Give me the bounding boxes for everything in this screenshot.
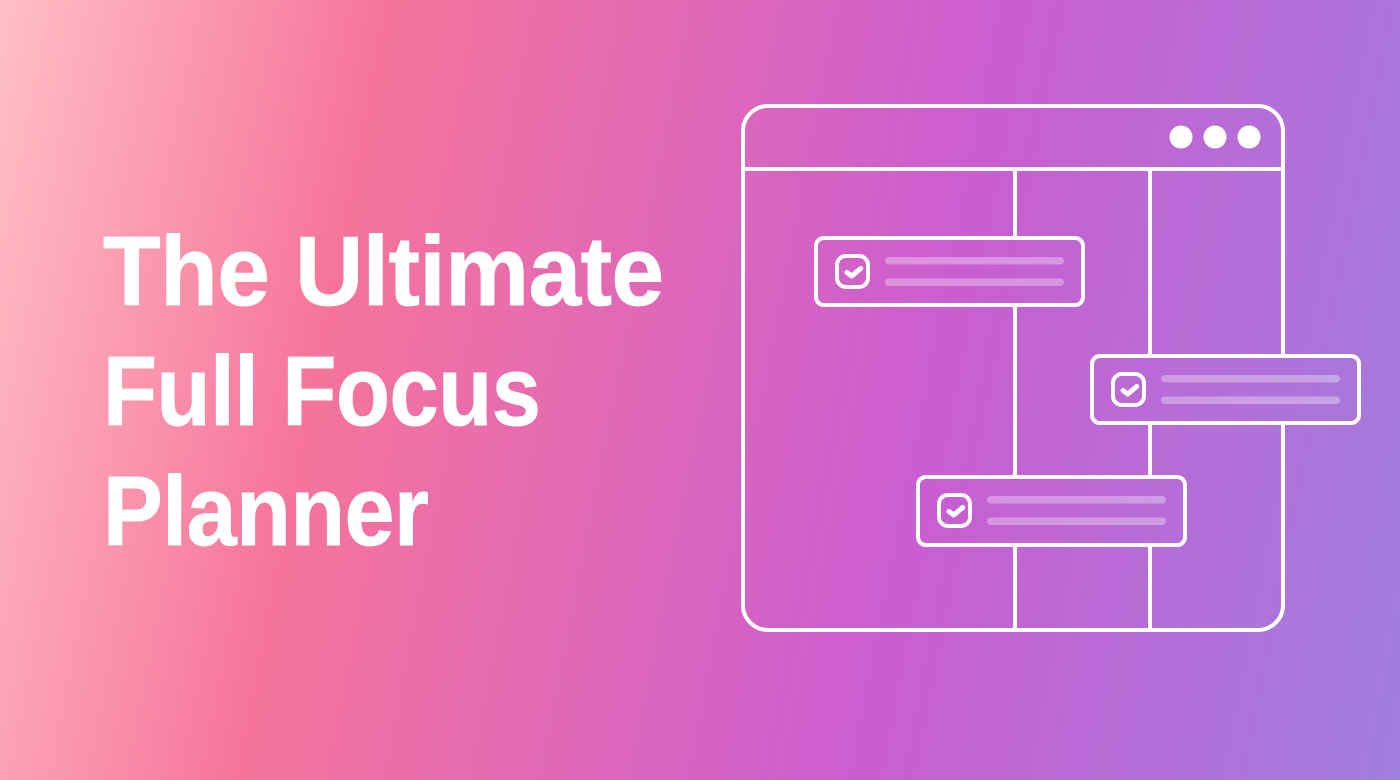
title: Full Focus [103, 336, 540, 446]
window frame [743, 106, 1283, 630]
calendar column lines [1015, 169, 1150, 630]
title: Planner [103, 456, 428, 566]
task card 3 [918, 477, 1185, 545]
task card 2 [1092, 356, 1359, 423]
task card 1 [816, 238, 1083, 305]
title [103, 216, 664, 566]
title: The Ultimate [103, 216, 664, 326]
window control dots [1170, 126, 1260, 148]
